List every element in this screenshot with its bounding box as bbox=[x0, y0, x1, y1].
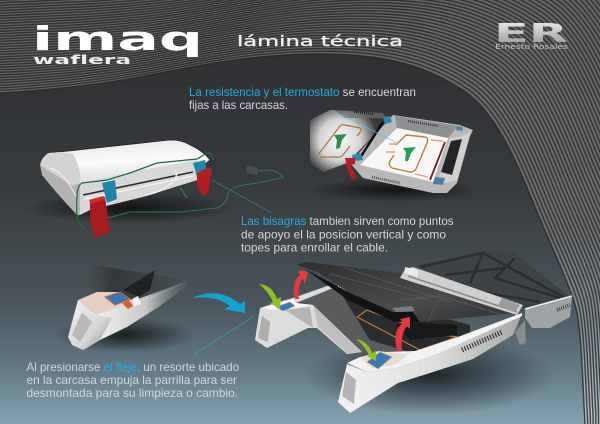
logo: ER Ernesto Rosales: ER bbox=[494, 19, 568, 49]
hinge bar bbox=[400, 267, 523, 315]
text block: bisagras: topes para enrollar el cable. bbox=[241, 242, 388, 254]
cable bbox=[108, 170, 283, 218]
illustration: detail of spring clip bbox=[55, 266, 195, 353]
arrow: green arrow left bbox=[259, 284, 281, 309]
left shell with foot bbox=[255, 285, 362, 354]
subtitle: waflera: waflera bbox=[33, 52, 131, 67]
arrow: red up arrow right bbox=[395, 317, 410, 350]
logo: ER Ernesto Rosales: Ernesto Rosales bbox=[495, 43, 568, 51]
text block: fleje bbox=[26, 361, 239, 400]
text block: fleje: desmontada para su limpieza o cambio. bbox=[26, 387, 238, 400]
arrow: green arrow right bbox=[356, 339, 376, 361]
illustration: open waffle iron with removable grill bbox=[255, 250, 572, 415]
grill plate bbox=[297, 262, 515, 322]
heading: lámina técnica: lámina técnica bbox=[237, 34, 403, 50]
back half bbox=[415, 250, 570, 309]
text block: bisagras: de apoyo el la posicion vertical y como bbox=[241, 228, 446, 242]
text block: fleje: Al presionarse el fleje, un resorte ubicado bbox=[26, 361, 239, 374]
front wall and foot bbox=[338, 314, 522, 413]
text block: resistencia y termostato: fijas a las carcasas. bbox=[189, 99, 288, 112]
logo: ER Ernesto Rosales bbox=[494, 19, 568, 51]
text block: resistencia y termostato bbox=[189, 86, 416, 112]
leader line bbox=[193, 317, 253, 355]
text block: bisagras: Las bisagras tambien sirven como puntos bbox=[241, 215, 454, 228]
arrow: blue transition arrow bbox=[192, 293, 245, 313]
arrow: red up arrow left bbox=[294, 270, 308, 299]
text block: fleje: en la carcasa empuja la parrilla para ser bbox=[26, 374, 237, 387]
plug bbox=[246, 165, 258, 175]
illustration: open waffle iron with resistance and thermostat bbox=[310, 110, 480, 202]
floor bbox=[302, 288, 407, 355]
blue clip plates bbox=[367, 352, 392, 369]
text block: resistencia y termostato: La resistencia y el termostato se encuentran bbox=[189, 86, 416, 99]
illustration: closed waffle iron with hinges and cable bbox=[25, 140, 283, 238]
text block: bisagras bbox=[241, 215, 454, 254]
title: imaq: imaq bbox=[32, 19, 203, 58]
